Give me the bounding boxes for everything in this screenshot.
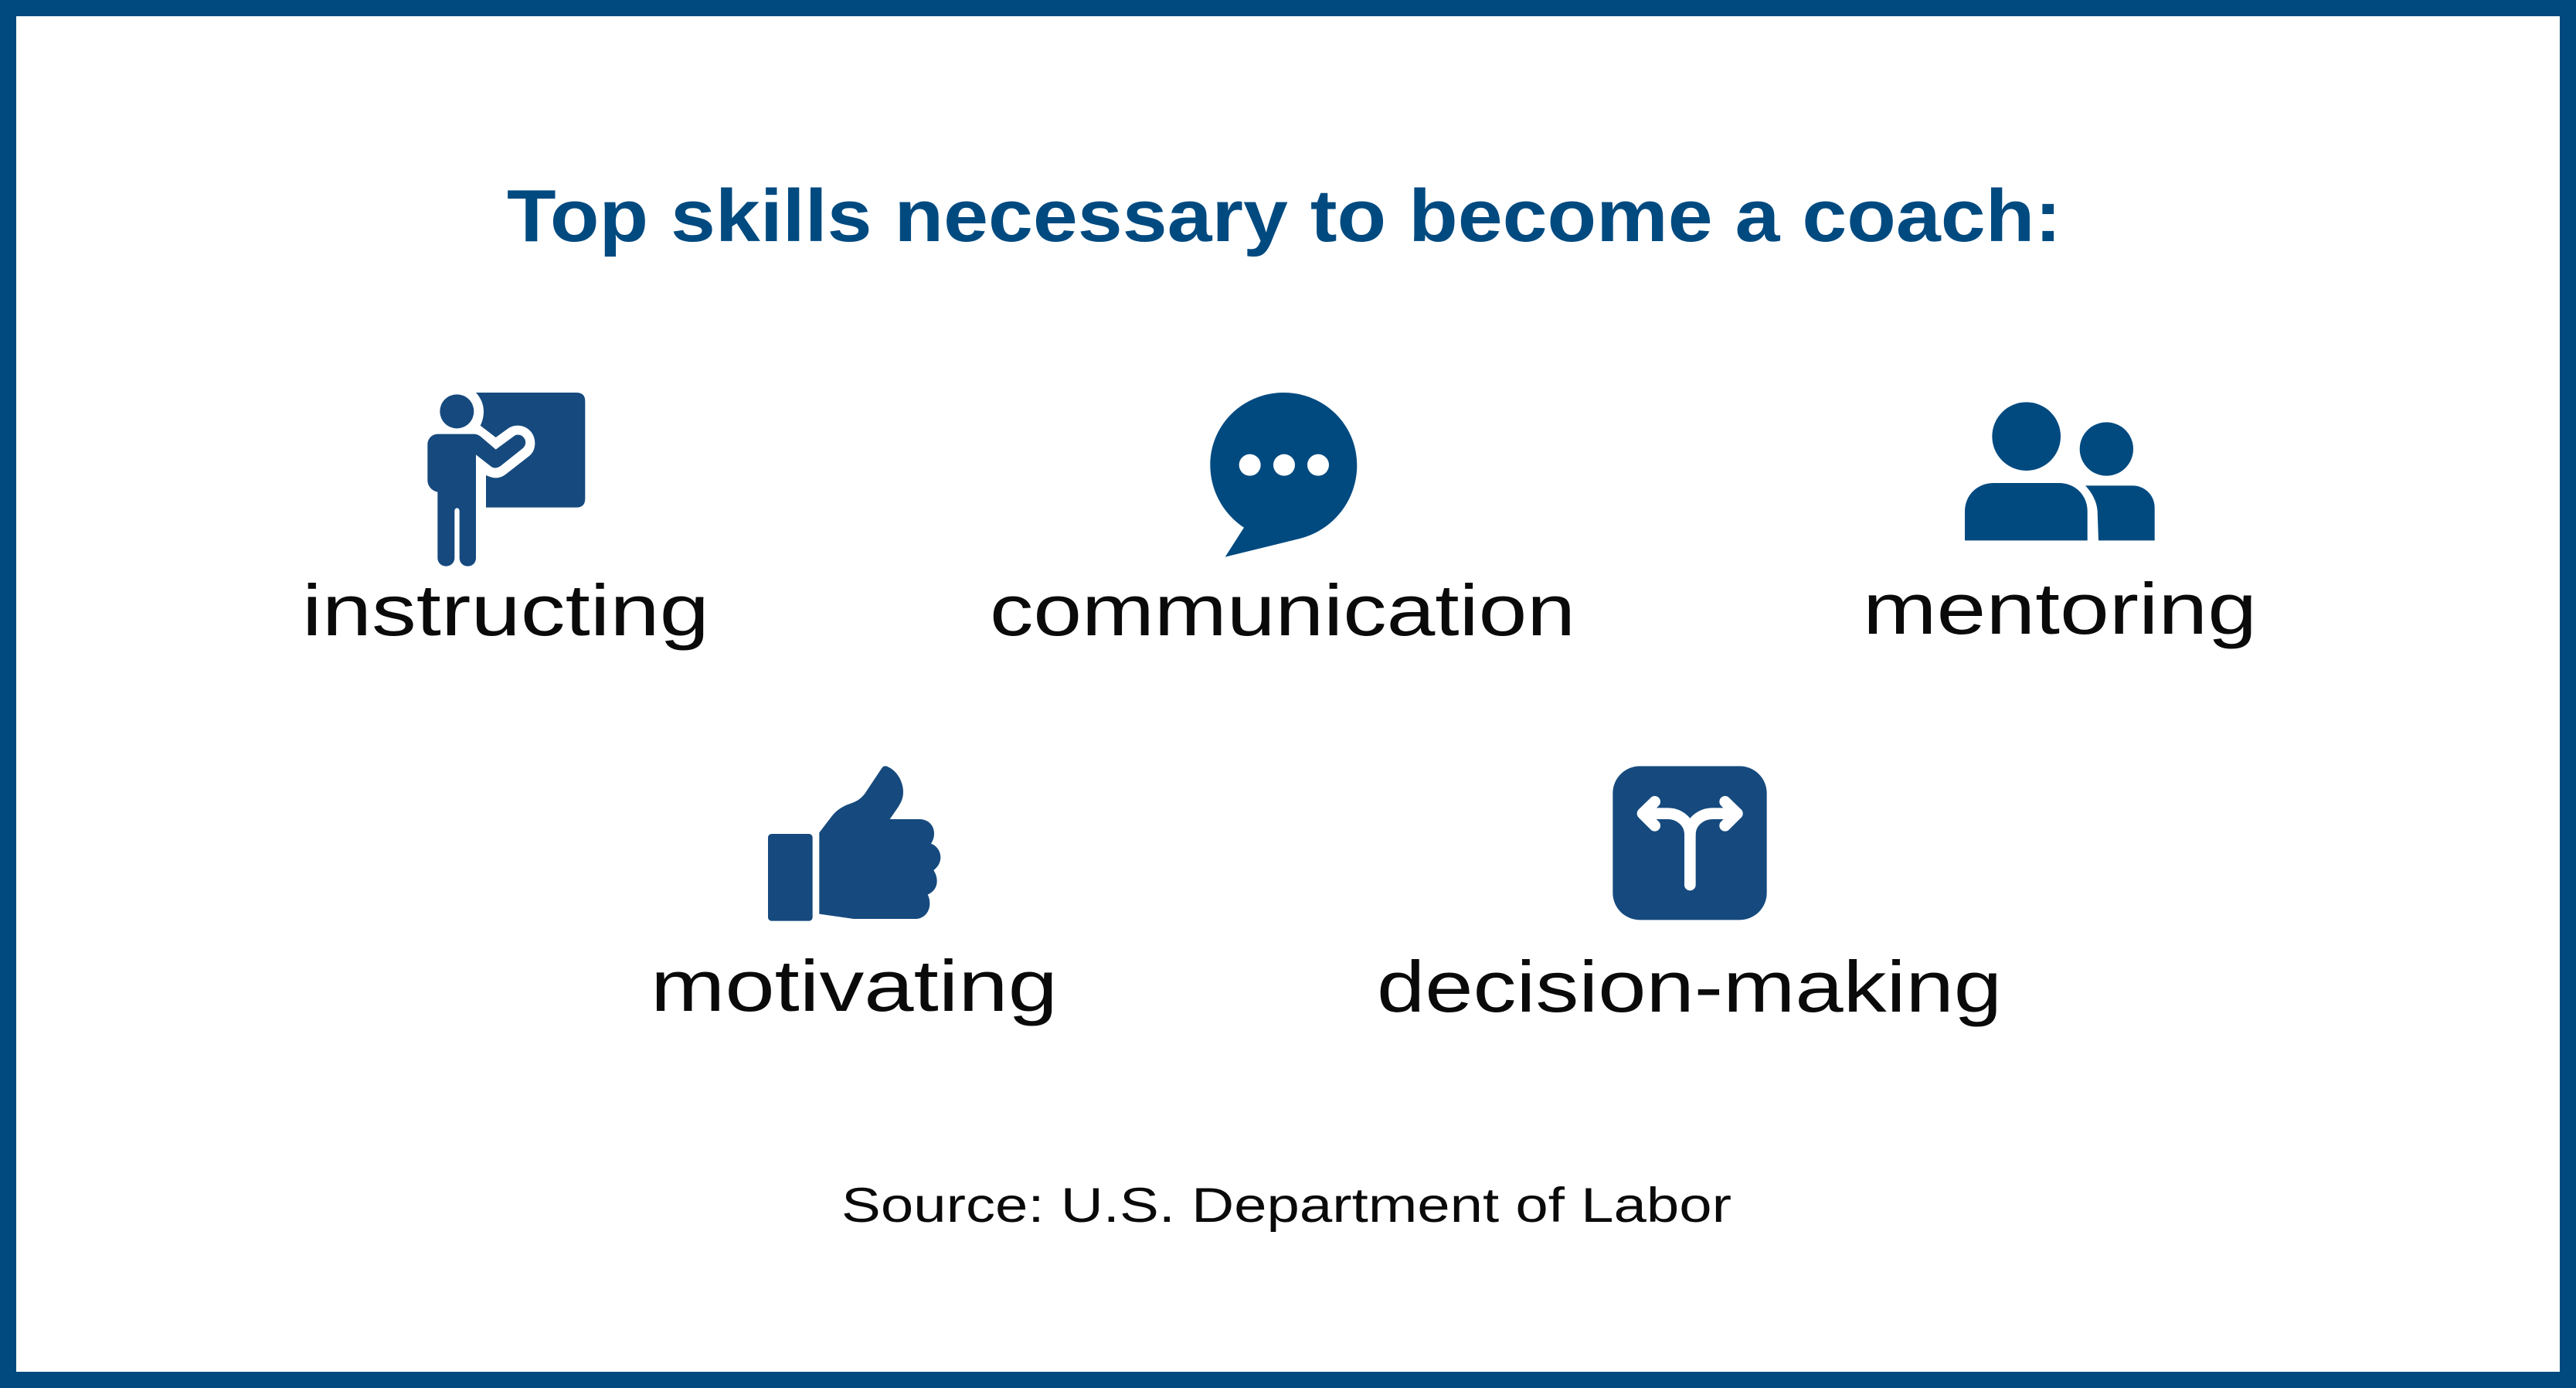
icon: forking arrow [1613, 766, 1767, 920]
source note: Source: U.S. Department of Labor [841, 1179, 1731, 1233]
skill: decision-making [1377, 766, 2002, 1027]
icon: thumbs up [768, 766, 940, 921]
label: mentoring: mentoring [1863, 568, 2257, 649]
icon: two people [1965, 402, 2155, 540]
skill: instructing [302, 393, 709, 651]
label: instructing: instructing [302, 570, 709, 651]
skill: mentoring [1863, 402, 2257, 649]
skill: motivating [651, 766, 1058, 1026]
icon: speech bubble [1210, 393, 1357, 557]
label: communication: communication [990, 570, 1575, 651]
title: Top skills necessary to become a coach: [507, 175, 2061, 257]
label: motivating: motivating [651, 945, 1058, 1026]
skill: communication [990, 393, 1575, 651]
icon: instructor at board [427, 393, 585, 566]
label: decision-making: decision-making [1377, 946, 2002, 1027]
